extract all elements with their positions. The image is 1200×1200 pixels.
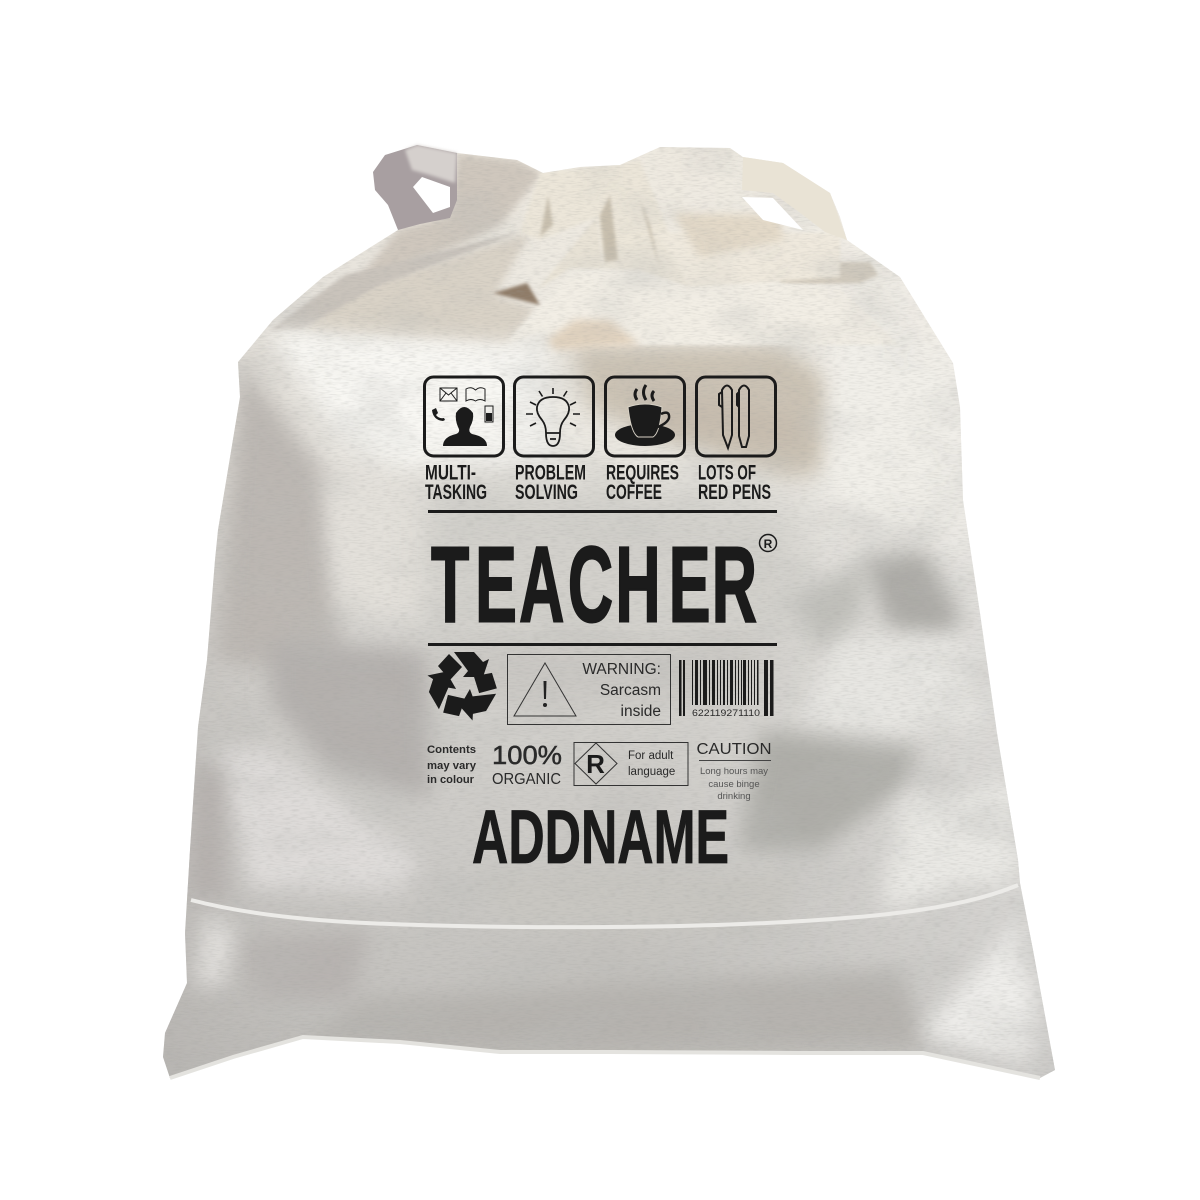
- large patches: [190, 262, 1035, 1060]
- caption: lots of red pens: [698, 462, 771, 504]
- title: TEACHER: [431, 524, 757, 645]
- caption: problem solving: PROBLEM: [515, 462, 586, 484]
- caption: requires coffee: [606, 462, 679, 504]
- rating text: For adult: [628, 750, 674, 762]
- icon: pens: [696, 377, 776, 456]
- barcode: [679, 660, 774, 719]
- contents note: may vary: [427, 760, 477, 772]
- right rope handle: [742, 157, 847, 240]
- bag body: [163, 145, 1055, 1078]
- caution note: [696, 741, 772, 802]
- caption: requires coffee: REQUIRES: [606, 462, 679, 484]
- R diamond: R: [586, 749, 605, 779]
- warning text: inside: [620, 703, 661, 720]
- contents note: [427, 744, 477, 786]
- contents note: Contents: [427, 744, 476, 756]
- R rating box: [574, 742, 688, 786]
- icon: light bulb: [514, 377, 594, 456]
- contents note: in colour: [427, 774, 475, 786]
- icon: multitasking: [424, 377, 504, 456]
- 100% organic: ORGANIC: [492, 771, 561, 788]
- caption: requires coffee: COFFEE: [606, 481, 662, 504]
- left shaded cloth: [270, 153, 543, 345]
- rating text: language: [628, 766, 675, 778]
- warning text: WARNING:: [582, 661, 661, 678]
- barcode digits: 622119271110: [692, 708, 760, 719]
- bottom hem seam: [191, 885, 1018, 927]
- registered mark: R: [764, 537, 773, 551]
- caption: multi-tasking: MULTI-: [425, 462, 476, 484]
- icon: warning triangle: [514, 663, 576, 716]
- caution note: cause binge: [708, 779, 760, 790]
- icon row: [424, 377, 776, 456]
- rating text: [628, 750, 675, 778]
- 100% organic: 100%: [492, 740, 562, 770]
- caution note: CAUTION: [696, 741, 772, 758]
- caption: lots of red pens: LOTS OF: [698, 462, 756, 484]
- fabric shading: [150, 120, 1070, 1100]
- caption: multi-tasking: [425, 462, 487, 504]
- speckled cloth grain: [276, 148, 1030, 1040]
- warning text: Sarcasm: [600, 682, 661, 699]
- printed teacher label: [421, 377, 777, 880]
- icon: coffee cup: [606, 377, 684, 456]
- warning text: [582, 661, 661, 720]
- 100% organic: [492, 740, 562, 788]
- left rope handle: [373, 145, 457, 230]
- caption: lots of red pens: RED PENS: [698, 481, 771, 504]
- caption: problem solving: SOLVING: [515, 481, 578, 504]
- caption: problem solving: [515, 462, 586, 504]
- bottom edge: [170, 1037, 1040, 1078]
- caption: multi-tasking: TASKING: [425, 481, 487, 504]
- warning box: [508, 654, 670, 724]
- icon captions: [425, 462, 771, 504]
- caution note: Long hours may: [700, 766, 768, 777]
- caution note: drinking: [717, 791, 751, 802]
- canvas drawstring bag: [150, 120, 1070, 1100]
- icon: recycle: [421, 652, 504, 724]
- name: ADDNAME: [472, 795, 729, 880]
- registered mark: [760, 534, 776, 552]
- gathered neck folds: [493, 175, 841, 352]
